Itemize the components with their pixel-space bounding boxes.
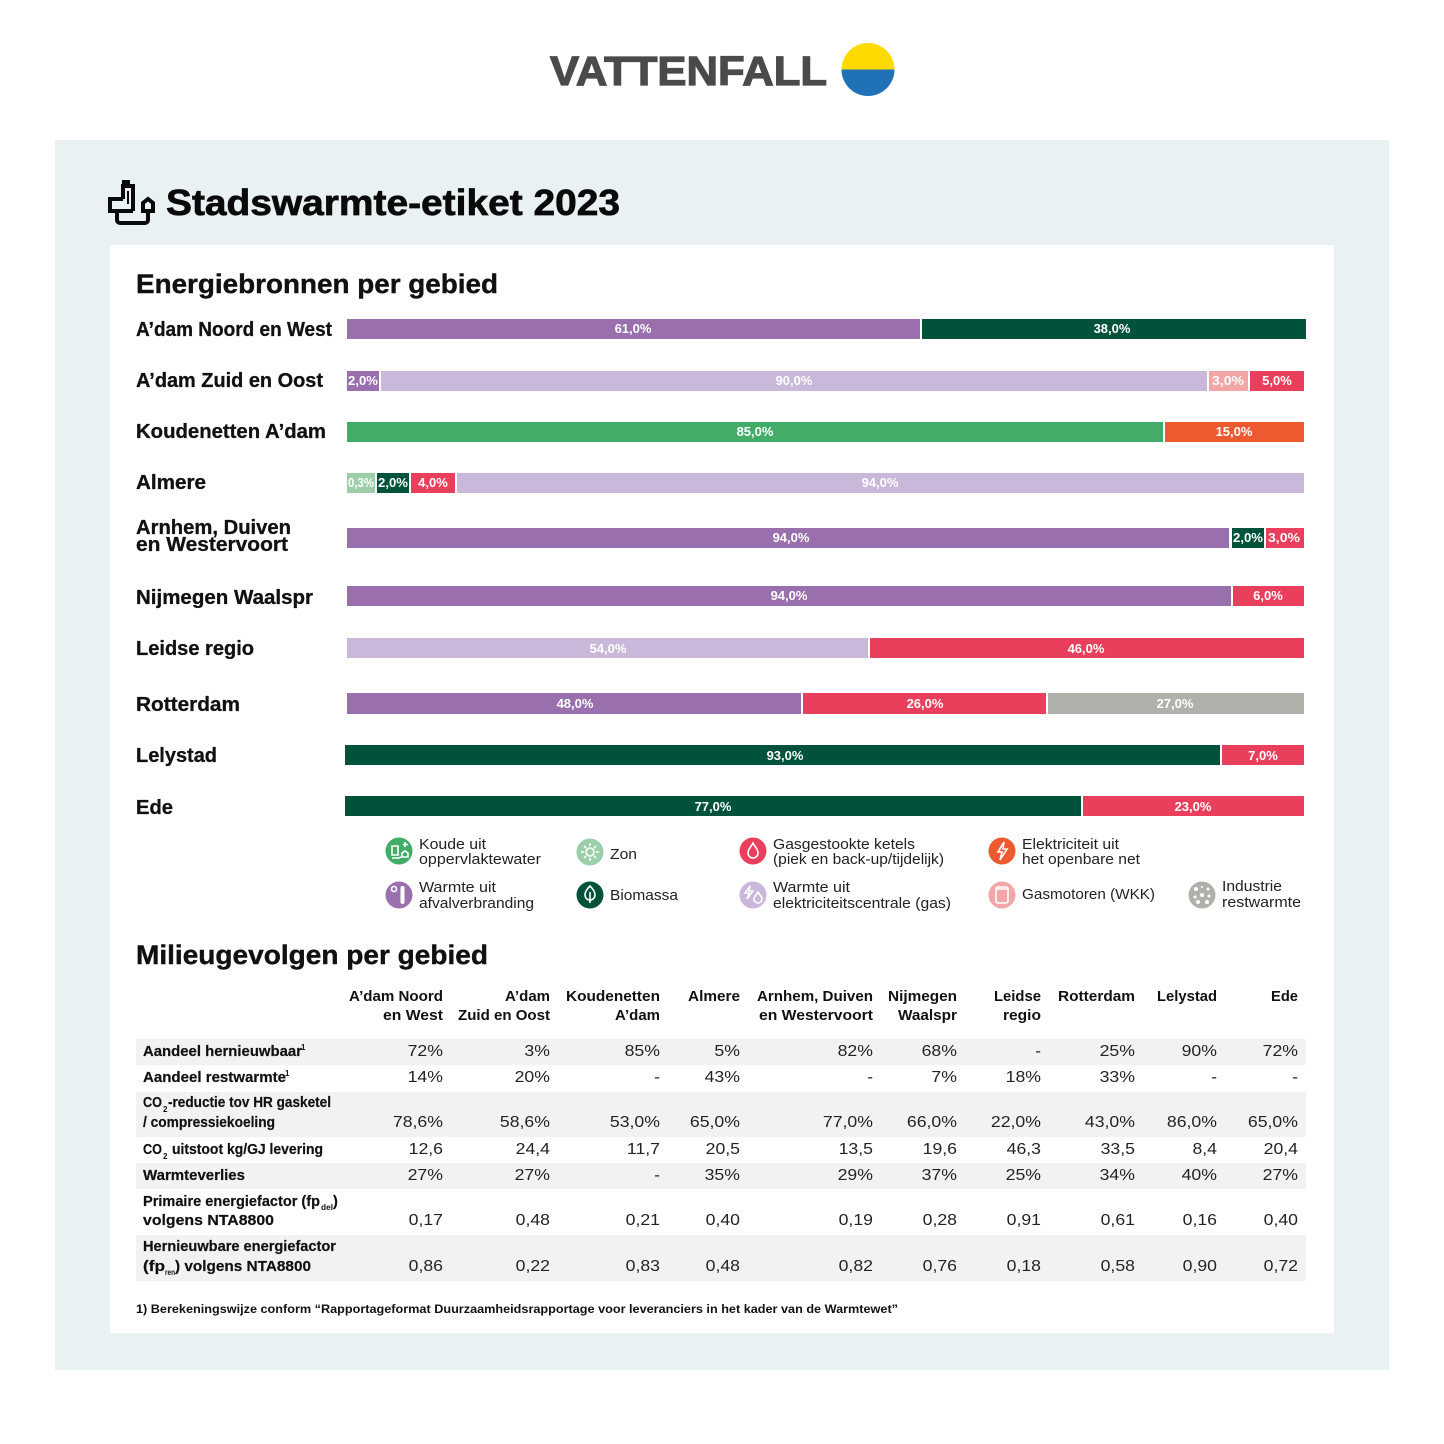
table row: Aandeel hernieuwbaar: 5% [714,1042,740,1060]
bar row: Almere: Almere [136,472,206,494]
legend item: Gasgestookte ketels: (piek en back-up/tijdelijk) [773,851,944,868]
legend item: Gasgestookte ketels [740,836,944,868]
bar row: Lelystad [136,745,1304,767]
bar row: Lelystad: 93,0% [767,748,804,763]
table header: Lelystad [1157,988,1217,1005]
table row: Aandeel restwarmte: - [1292,1068,1298,1086]
table row: CO2 uitstoot: 24,4 [516,1140,550,1158]
bar row: Lelystad: Lelystad [136,745,217,767]
table row: Primaire energiefactor: 0,40 [1264,1211,1298,1229]
table header: Arnhem, Duiven [757,988,873,1005]
table row: CO2 uitstoot: uitstoot kg/GJ levering [172,1142,323,1158]
legend item: Industrie restwarmte: Industrie [1222,878,1282,895]
table header: en West [383,1007,443,1024]
table row: Aandeel restwarmte [143,1068,1298,1086]
title: Stadswarmte-etiket 2023 [166,182,620,223]
bar row: Lelystad: 7,0% [1248,748,1278,763]
table row: CO2-reductie: 43,0% [1085,1113,1135,1131]
table row: Primaire energiefactor: 0,91 [1007,1211,1041,1229]
table row: Hernieuwbare energiefactor: 0,76 [923,1257,957,1275]
table row: CO2-reductie: 66,0% [907,1113,957,1131]
table row: Primaire energiefactor: 0,16 [1183,1211,1217,1229]
table row: Hernieuwbare energiefactor: (fp [143,1259,165,1275]
legend item: Gasmotoren (WKK): Gasmotoren (WKK) [1022,886,1155,903]
table header: en Westervoort [759,1007,873,1024]
table row: Primaire energiefactor: volgens NTA8800 [143,1213,274,1229]
table row: Aandeel restwarmte: 18% [1006,1068,1041,1086]
legend item: Warmte uit elektriciteitscentrale (gas) [740,879,951,912]
table row: Hernieuwbare energiefactor: 0,58 [1101,1257,1135,1275]
table row: Aandeel restwarmte: 14% [408,1068,443,1086]
heading: environmental effects: Milieugevolgen per gebied [136,940,488,970]
table row: Aandeel restwarmte: 43% [705,1068,740,1086]
table row: Warmteverlies: 27% [408,1166,443,1184]
bar row: Nijmegen Waalspr: 6,0% [1253,588,1283,603]
table row: Aandeel hernieuwbaar: Aandeel hernieuwbaar [143,1044,302,1060]
bar row: A'dam Zuid en Oost: 2,0% [348,373,378,388]
table row: Hernieuwbare energiefactor: 0,22 [516,1257,550,1275]
bar row: Almere: 2,0% [378,475,408,490]
table row: Aandeel restwarmte: 20% [515,1068,550,1086]
table header: Almere [688,988,740,1005]
table row: Warmteverlies: 29% [838,1166,873,1184]
table row: Warmteverlies: Warmteverlies [143,1168,245,1184]
bar row: A'dam Zuid en Oost [136,370,1304,392]
table row: CO2 uitstoot: 46,3 [1007,1140,1041,1158]
table row: CO2 uitstoot: 8,4 [1192,1140,1217,1158]
table row: CO2-reductie: 86,0% [1167,1113,1217,1131]
table row: CO2 uitstoot: 11,7 [627,1140,660,1158]
bar row: Rotterdam [136,693,1304,716]
bar row: A'dam Zuid en Oost: 3,0% [1212,373,1244,388]
table row: CO2 uitstoot: 20,4 [1264,1140,1298,1158]
bar row: Ede: Ede [136,797,173,819]
bar row: A'dam Noord en West: 38,0% [1094,321,1131,336]
table header: Rotterdam [1058,988,1135,1005]
legend item: Zon: Zon [610,846,637,863]
table row: Aandeel restwarmte: - [1211,1068,1217,1086]
table row: Hernieuwbare energiefactor [136,1235,1306,1281]
table row: Warmteverlies: 37% [922,1166,957,1184]
bar row: Rotterdam: Rotterdam [136,694,240,716]
bar row: Almere: 4,0% [418,475,448,490]
table row: Hernieuwbare energiefactor: 0,90 [1183,1257,1217,1275]
table header: Waalspr [898,1007,957,1024]
legend item: Warmte uit afvalverbranding [386,879,534,912]
legend item: Elektriciteit uit het openbare net: Elektriciteit uit [1022,836,1120,853]
bar row: Arnhem, Duiven en Westervoort: 2,0% [1233,530,1263,545]
bar row: Koudenetten A'dam: 15,0% [1216,424,1253,439]
table row: Aandeel hernieuwbaar: 72% [1263,1042,1298,1060]
legend item: Elektriciteit uit het openbare net: het openbare net [1022,851,1141,868]
table row: CO2-reductie: CO [143,1095,162,1111]
table row: CO2 uitstoot: 33,5 [1101,1140,1135,1158]
table row: Hernieuwbare energiefactor: 0,48 [706,1257,740,1275]
table row: Hernieuwbare energiefactor: ) volgens NTA8800 [175,1259,311,1275]
bar row: Almere [136,472,1304,494]
table row: Primaire energiefactor: del [321,1203,333,1212]
table header: Ede [1271,988,1298,1005]
table header: Nijmegen [888,988,957,1005]
bar row: A'dam Zuid en Oost: A’dam Zuid en Oost [136,370,323,392]
table row: Hernieuwbare energiefactor: 0,83 [626,1257,660,1275]
bar row: Ede [136,796,1304,819]
bar row: Arnhem, Duiven en Westervoort: en Westervoort [136,534,288,556]
table row: Aandeel hernieuwbaar: 82% [838,1042,873,1060]
bar row: A'dam Zuid en Oost: 5,0% [1262,373,1292,388]
legend item: Warmte uit afvalverbranding: Warmte uit [419,879,497,896]
table row: CO2-reductie: 22,0% [991,1113,1041,1131]
table header [349,988,1298,1024]
bar row: Nijmegen Waalspr: Nijmegen Waalspr [136,587,313,609]
bar row: Almere: 94,0% [862,475,899,490]
table row: Hernieuwbare energiefactor: 0,18 [1007,1257,1041,1275]
table row: CO2 uitstoot: 20,5 [706,1140,740,1158]
table row: Aandeel hernieuwbaar: 3% [524,1042,550,1060]
table header: A’dam Noord [349,988,443,1005]
table row: Warmteverlies: 40% [1182,1166,1217,1184]
table row: Warmteverlies: - [654,1166,660,1184]
table row: Primaire energiefactor: 0,21 [626,1211,660,1229]
table row: Primaire energiefactor: 0,40 [706,1211,740,1229]
table row: CO2-reductie [136,1092,1306,1137]
table row: Aandeel hernieuwbaar: 85% [625,1042,660,1060]
table row: Primaire energiefactor: ) [333,1194,338,1210]
legend item: Gasmotoren (WKK) [988,882,1155,908]
table header: Zuid en Oost [458,1007,550,1024]
table row: Aandeel hernieuwbaar: 72% [408,1042,443,1060]
table row: CO2-reductie: 2 [163,1105,168,1114]
table header: A’dam [615,1007,660,1024]
legend item: Gasgestookte ketels: Gasgestookte ketels [773,836,915,853]
table row: Primaire energiefactor: 0,19 [839,1211,873,1229]
heading: energy sources: Energiebronnen per gebied [136,269,498,299]
footnote: 1) Berekeningswijze conform “Rapportageformat Duurzaamheidsrapportage voor leveranciers in het kader van de Warmtewet” [136,1304,898,1316]
legend item: Industrie restwarmte [1188,878,1301,911]
bar row: A'dam Zuid en Oost: 90,0% [776,373,813,388]
bar row: Rotterdam: 26,0% [907,696,944,711]
bar row: Rotterdam: 48,0% [557,696,594,711]
bar row: Leidse regio: 54,0% [590,641,627,656]
table row: CO2 uitstoot: CO [143,1142,162,1158]
table row: CO2-reductie: 78,6% [393,1113,443,1131]
table row: Warmteverlies: 25% [1006,1166,1041,1184]
panel: label background [55,140,1389,1370]
table row: Warmteverlies: 27% [515,1166,550,1184]
table row: Warmteverlies: 35% [705,1166,740,1184]
legend item: Koude uit oppervlaktewater [386,836,541,868]
legend item: Elektriciteit uit het openbare net [988,836,1141,868]
table row: CO2 uitstoot: 19,6 [923,1140,957,1158]
bar row: Nijmegen Waalspr: 94,0% [771,588,808,603]
table row: CO2 uitstoot: 2 [163,1152,168,1161]
table row: Warmteverlies: 27% [1263,1166,1298,1184]
legend [386,836,1301,912]
table row: Hernieuwbare energiefactor: Hernieuwbare energiefactor [143,1239,336,1255]
table row: CO2 uitstoot: 12,6 [409,1140,443,1158]
bar row: Rotterdam: 27,0% [1157,696,1194,711]
table row: CO2 uitstoot: 13,5 [839,1140,873,1158]
table row: Aandeel hernieuwbaar: 90% [1182,1042,1217,1060]
table row: Aandeel hernieuwbaar: 25% [1100,1042,1135,1060]
legend item: Zon [576,838,637,866]
logo: Vattenfall: VATTENFALL [550,48,827,94]
table row: Primaire energiefactor: 0,48 [516,1211,550,1229]
table header: A’dam [505,988,550,1005]
table row: Aandeel hernieuwbaar: 1 [301,1043,306,1052]
table row: CO2-reductie: -reductie tov HR gasketel [168,1095,331,1111]
icon: district heating plant with house [110,182,153,223]
table row: CO2-reductie: 65,0% [1248,1113,1298,1131]
table row: CO2-reductie: 77,0% [823,1113,873,1131]
table row: Aandeel restwarmte: Aandeel restwarmte [143,1070,286,1086]
table row: Primaire energiefactor: 0,61 [1101,1211,1135,1229]
bar row: Arnhem, Duiven en Westervoort: 3,0% [1268,530,1300,545]
table row: Primaire energiefactor [143,1194,1298,1229]
legend item: Biomassa: Biomassa [610,887,679,904]
table row: Hernieuwbare energiefactor: 0,82 [839,1257,873,1275]
table row: CO2 uitstoot [143,1140,1298,1161]
bar row: Nijmegen Waalspr [136,586,1304,609]
table row: Warmteverlies: 34% [1100,1166,1135,1184]
table row: Aandeel hernieuwbaar [136,1039,1306,1065]
bar row: Ede: 23,0% [1175,799,1212,814]
table row: Primaire energiefactor: 0,28 [923,1211,957,1229]
table row: Hernieuwbare energiefactor: 0,72 [1264,1257,1298,1275]
table row: Aandeel restwarmte: 1 [285,1069,290,1078]
bar row: Leidse regio [136,638,1304,660]
bar row: Almere: 0,3% [348,475,374,490]
legend item: Biomassa [576,882,679,908]
table header: Leidse [994,988,1041,1005]
table row: Aandeel hernieuwbaar: - [1035,1042,1041,1060]
bar row: Koudenetten A'dam [136,421,1304,443]
panel: white content card [110,245,1334,1333]
table row: CO2-reductie: 65,0% [690,1113,740,1131]
bar row: Arnhem, Duiven en Westervoort: Arnhem, Duiven [136,517,291,539]
table row: CO2-reductie: / compressiekoeling [143,1115,275,1131]
bar row: Leidse regio: Leidse regio [136,638,254,660]
logo: Vattenfall [550,43,894,96]
table row: Aandeel restwarmte: - [867,1068,873,1086]
bar row: Koudenetten A'dam: Koudenetten A’dam [136,421,326,443]
table row: Warmteverlies [136,1163,1306,1189]
table row: Primaire energiefactor: 0,17 [409,1211,443,1229]
legend item: Industrie restwarmte: restwarmte [1222,894,1301,911]
bar row: A'dam Noord en West [136,319,1306,341]
bar row: Koudenetten A'dam: 85,0% [737,424,774,439]
table row: Aandeel restwarmte: 33% [1100,1068,1135,1086]
bar row: Leidse regio: 46,0% [1068,641,1105,656]
table header: regio [1003,1007,1041,1024]
table row: Aandeel hernieuwbaar: 68% [922,1042,957,1060]
table row: CO2-reductie: 58,6% [500,1113,550,1131]
table row: Hernieuwbare energiefactor: ren [165,1268,175,1277]
bar row: Ede: 77,0% [695,799,732,814]
bar row: A'dam Noord en West: 61,0% [615,321,652,336]
bar row: Arnhem, Duiven en Westervoort [136,517,1304,556]
legend item: Koude uit oppervlaktewater: oppervlaktewater [419,851,541,868]
table row: Aandeel restwarmte: - [654,1068,660,1086]
legend item: Warmte uit elektriciteitscentrale (gas): elektriciteitscentrale (gas) [773,895,951,912]
bar row: A'dam Noord en West: A’dam Noord en West [136,319,332,341]
legend item: Koude uit oppervlaktewater: Koude uit [419,836,487,853]
bar row: Arnhem, Duiven en Westervoort: 94,0% [773,530,810,545]
table row: Aandeel restwarmte: 7% [931,1068,957,1086]
table row: CO2-reductie: 53,0% [610,1113,660,1131]
legend item: Warmte uit afvalverbranding: afvalverbranding [419,895,534,912]
legend item: Warmte uit elektriciteitscentrale (gas): Warmte uit [773,879,851,896]
table header: Koudenetten [566,988,660,1005]
table row: Primaire energiefactor: Primaire energiefactor (fp [143,1194,320,1210]
table row: Hernieuwbare energiefactor: 0,86 [409,1257,443,1275]
